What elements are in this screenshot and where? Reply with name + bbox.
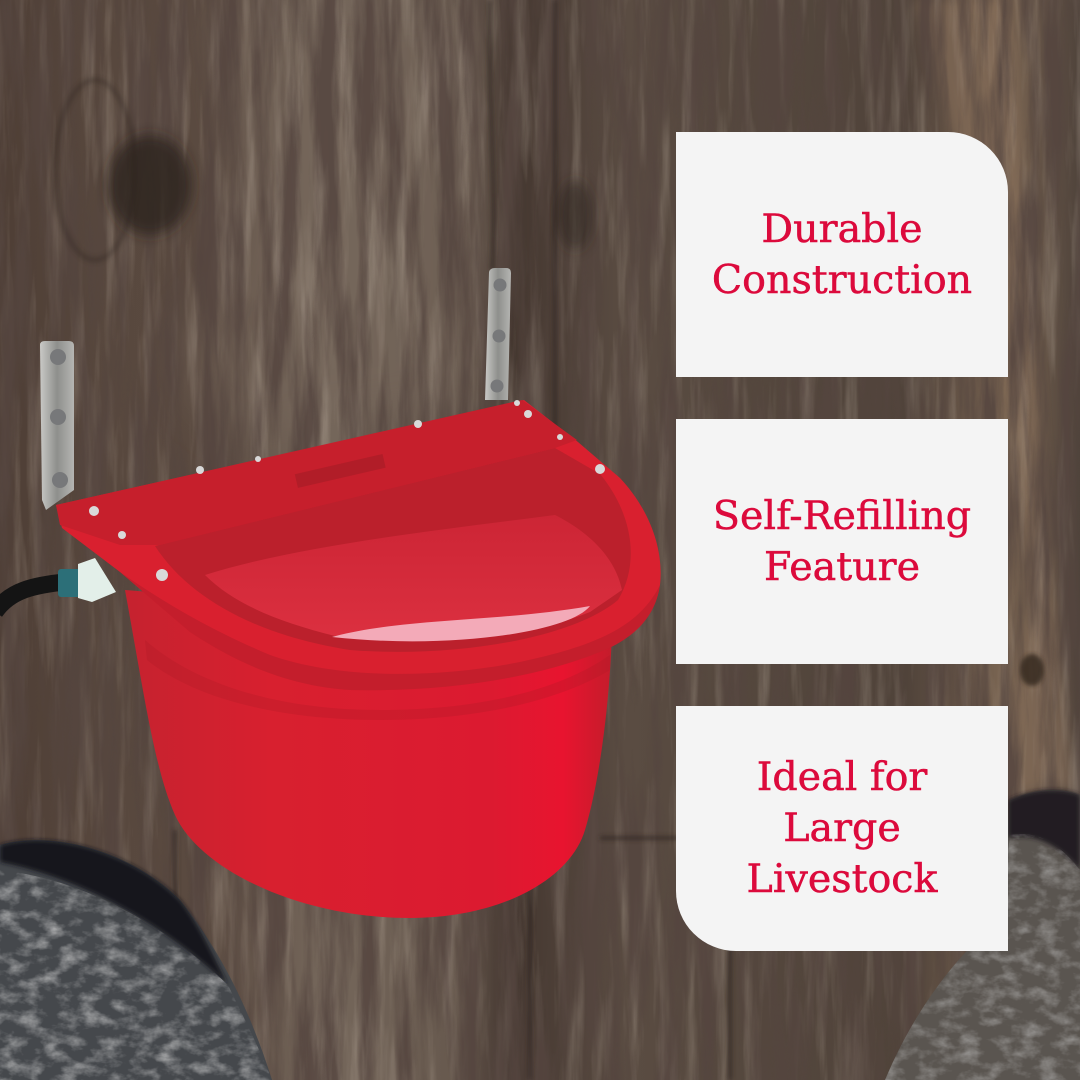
card: self-refilling feature (676, 419, 1008, 664)
bucket body (125, 590, 612, 918)
card: ideal for large livestock: Large (783, 805, 901, 851)
water highlight (332, 606, 590, 641)
moulded logo plate (295, 454, 386, 488)
rim lower shadow (120, 572, 660, 690)
card: self-refilling feature: Feature (764, 544, 920, 590)
animal fur: left (0, 840, 272, 1080)
card: durable construction (676, 132, 1008, 377)
card: ideal for large livestock: Livestock (747, 856, 937, 902)
bucket upper band shadow (145, 640, 610, 720)
bucket (56, 400, 661, 918)
bucket interior (155, 448, 631, 652)
water surface (205, 515, 622, 640)
card: durable construction: Construction (712, 256, 972, 302)
card: self-refilling feature: Self-Refilling (713, 492, 971, 538)
animal fur: right (885, 790, 1080, 1080)
rim (56, 400, 661, 690)
top shelf (56, 400, 577, 545)
card: ideal for large livestock: Ideal for (757, 754, 927, 800)
water hose and fitting (0, 558, 116, 612)
card: durable construction: Durable (761, 206, 923, 252)
rim screws (89, 400, 605, 581)
card: ideal for large livestock (676, 706, 1008, 951)
wall bracket: left (40, 341, 74, 510)
wall bracket: right (485, 268, 511, 400)
